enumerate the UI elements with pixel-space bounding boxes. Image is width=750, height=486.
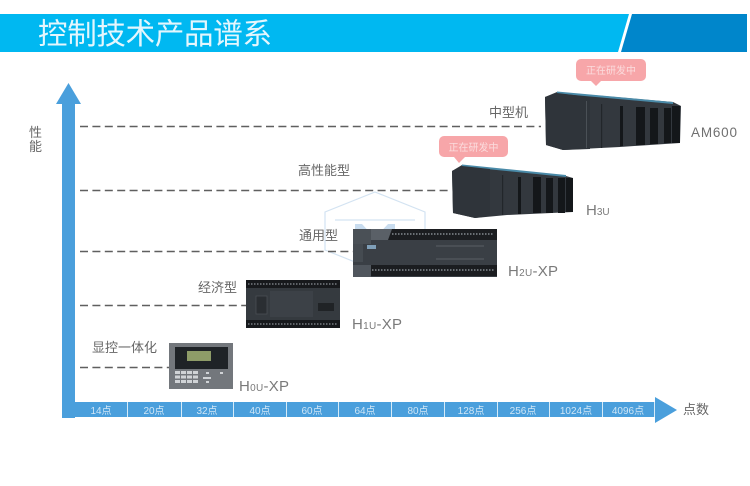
performance axis arrow bbox=[56, 83, 81, 418]
points axis bar: 20点 bbox=[143, 405, 165, 417]
label: mid-size PLC: 中型机 bbox=[489, 105, 528, 120]
model: H0U-XP: H0U-XP bbox=[239, 378, 289, 395]
points axis bar: 128点 bbox=[458, 405, 484, 417]
axis label: performance: 性 bbox=[29, 125, 42, 140]
label: general purpose: 通用型 bbox=[299, 228, 338, 243]
header banner bbox=[0, 14, 747, 52]
points axis bar: 60点 bbox=[301, 405, 323, 417]
points axis bar: 80点 bbox=[407, 405, 429, 417]
product: H2U-XP device bbox=[353, 229, 497, 277]
title: 控制技术产品谱系 bbox=[38, 18, 272, 51]
dashed level lines bbox=[80, 126, 541, 368]
axis label: performance: 能 bbox=[29, 139, 42, 154]
label: integrated display: 显控一体化 bbox=[92, 340, 157, 355]
points axis bar: 1024点 bbox=[560, 405, 592, 417]
points axis bar: 32点 bbox=[196, 405, 218, 417]
points axis bar: 14点 bbox=[90, 405, 112, 417]
badge: in development (AM600): 正在研发中 bbox=[586, 64, 636, 77]
model: H3U: H3U bbox=[586, 202, 610, 219]
model: AM600: AM600 bbox=[691, 125, 737, 140]
product: H1U-XP device bbox=[246, 280, 340, 328]
product: H0U-XP device bbox=[169, 343, 233, 389]
label: economy: 经济型 bbox=[198, 280, 237, 295]
axis label: points: 点数 bbox=[683, 402, 709, 417]
axis label: performance bbox=[29, 125, 42, 154]
product: AM600 device bbox=[545, 92, 681, 150]
model: H2U-XP: H2U-XP bbox=[508, 263, 558, 280]
product: H3U device bbox=[452, 164, 573, 218]
points axis bar: 64点 bbox=[354, 405, 376, 417]
points axis bar bbox=[75, 397, 677, 423]
points axis bar: 40点 bbox=[249, 405, 271, 417]
badge: in development (H3U) bbox=[439, 136, 508, 163]
label: high performance: 高性能型 bbox=[298, 163, 350, 178]
points axis bar: 256点 bbox=[510, 405, 536, 417]
badge: in development (AM600) bbox=[576, 59, 646, 86]
model: H1U-XP: H1U-XP bbox=[352, 316, 402, 333]
points axis bar: 4096点 bbox=[612, 405, 644, 417]
watermark bbox=[325, 192, 425, 270]
badge: in development (H3U): 正在研发中 bbox=[448, 141, 498, 154]
